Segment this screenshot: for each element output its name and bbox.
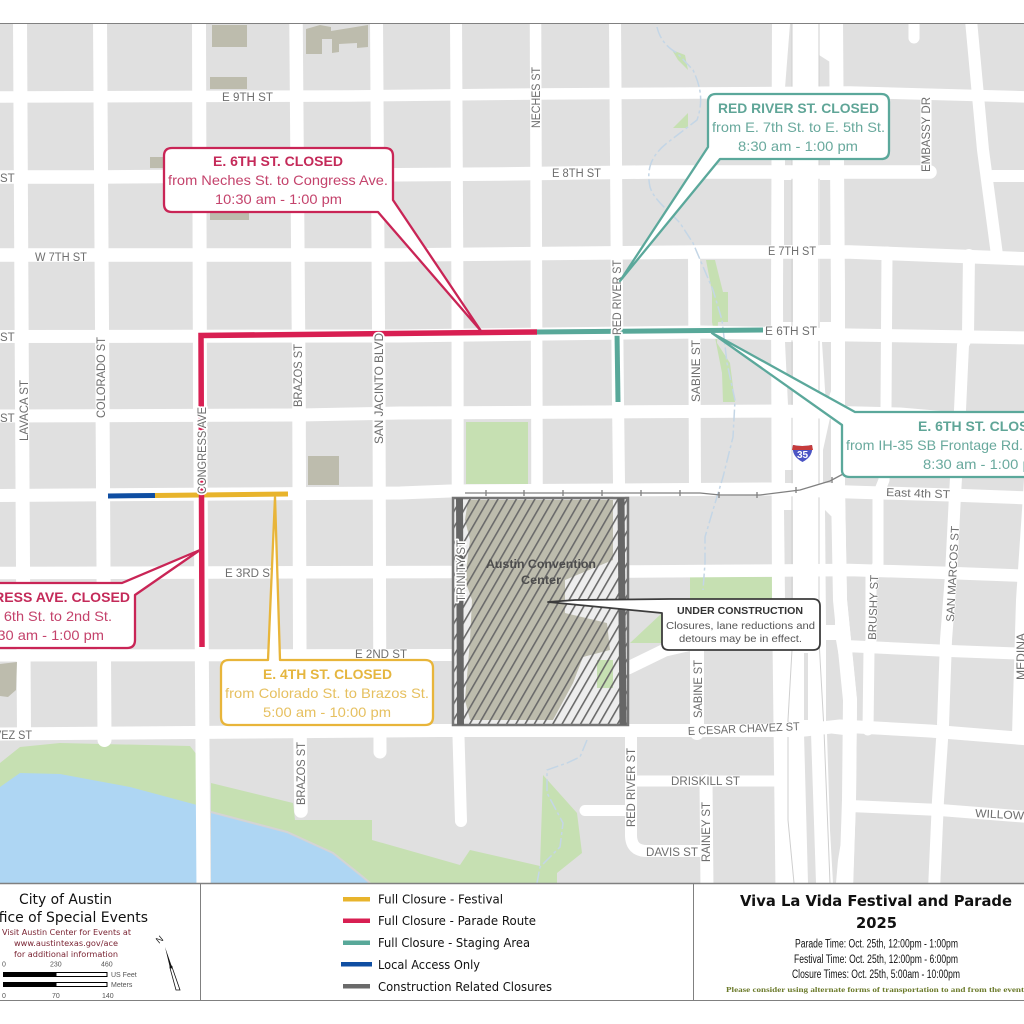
street labels: BRUSHY ST (867, 575, 881, 640)
I-35 shield icon (792, 445, 813, 462)
buildings (0, 25, 368, 697)
street labels: BRAZOS ST (296, 742, 308, 805)
label: Austin Convention Center: Center (521, 575, 562, 587)
parks (466, 50, 772, 643)
icon: north arrow (154, 934, 180, 990)
heading: office name (0, 892, 148, 926)
callout: E. 6th St. closed, Neches to Congress: 10:30 am - 1:00 pm (215, 191, 342, 207)
lake and shoreline (0, 743, 582, 883)
scale bars: 230 (50, 962, 62, 968)
scale bars: 70 (52, 993, 60, 1000)
callout: E. 6th St. closed, Neches to Congress (164, 148, 481, 331)
callout: Congress Ave. closed (0, 550, 200, 648)
event times: Closure Times: Oct. 25th, 5:00am - 10:00pm (792, 969, 960, 981)
street labels: E 8TH ST (552, 168, 601, 180)
street labels: ST (0, 173, 15, 185)
callout: E. 4th St. closed (221, 497, 433, 725)
street labels: SAN MARCOS ST (945, 526, 962, 622)
callout: under construction: Closures, lane reductions and (666, 620, 815, 632)
creek (537, 27, 735, 883)
callout: under construction: UNDER CONSTRUCTION (677, 605, 803, 617)
street labels: NECHES ST (531, 67, 543, 128)
street labels: ST (0, 413, 15, 425)
callout: E. 6th St. closed, IH-35 frontage: from IH-35 SB Frontage Rd. (846, 437, 1023, 453)
scale bars (2, 962, 137, 1000)
scale bars: 0 (2, 962, 6, 968)
callout: E. 4th St. closed: 5:00 am - 10:00 pm (263, 704, 391, 720)
scale bars: US Feet (111, 972, 137, 979)
callout: under construction (548, 599, 820, 650)
callout: Red River St. closed: from E. 7th St. to E. 5th St. (712, 119, 885, 135)
title (740, 892, 1012, 932)
railway (465, 473, 845, 498)
street labels: SABINE ST (691, 340, 703, 402)
panel: event title and times (726, 892, 1024, 994)
closure: festival and local access on E 4th St (108, 494, 288, 496)
panel: legend (341, 892, 552, 994)
callout: E. 6th St. closed, Neches to Congress: from Neches St. to Congress Ave. (168, 172, 388, 188)
legend: full closure festival: Full Closure - Festival (378, 892, 503, 906)
street labels: E 7TH ST (768, 246, 816, 258)
street labels: RED RIVER ST (612, 260, 624, 335)
label: Austin Convention Center: Austin Convention (486, 559, 596, 571)
event times: Parade Time: Oct. 25th, 12:00pm - 1:00pm (795, 938, 958, 950)
callout: E. 4th St. closed: from Colorado St. to Brazos St. (225, 685, 429, 701)
closure: parade route (201, 332, 537, 647)
heading: office name: City of Austin (19, 892, 112, 908)
scale bars: 460 (101, 962, 113, 968)
label: Austin Convention Center (486, 559, 596, 584)
street labels: EMBASSY DR (921, 97, 933, 172)
callout: E. 4th St. closed: E. 4TH ST. CLOSED (263, 666, 392, 682)
street labels (0, 67, 1024, 862)
street labels: E 2ND ST (355, 649, 407, 661)
convention center building (465, 500, 613, 720)
street labels: E 3RD ST (225, 568, 277, 580)
I-35 corridor (783, 24, 843, 883)
text: visit link: Visit Austin Center for Events at (2, 928, 131, 937)
scale bars: Meters (111, 982, 133, 989)
street labels: SAN JACINTO BLVD (374, 333, 386, 444)
callout: E. 6th St. closed, Neches to Congress: E. 6TH ST. CLOSED (213, 153, 343, 169)
panel: city of austin credits (0, 892, 180, 1000)
legend: full closure parade route: Full Closure - Parade Route (378, 914, 536, 928)
closure: staging area (537, 330, 763, 402)
callout: E. 6th St. closed, IH-35 frontage (712, 333, 1024, 477)
scale bars: 0 (2, 993, 6, 1000)
text: visit link: for additional information (14, 950, 118, 959)
legend: full closure staging area: Full Closure - Staging Area (378, 936, 530, 950)
text: visit link: www.austintexas.gov/ace (14, 939, 118, 948)
street labels: East 4th ST (886, 487, 950, 501)
text: visit link (2, 928, 131, 959)
street labels: W 7TH ST (35, 252, 87, 264)
title: Viva La Vida Festival and Parade (740, 892, 1012, 910)
construction closure lines (460, 498, 461, 725)
street labels: DRISKILL ST (671, 776, 740, 788)
event times: Festival Time: Oct. 25th, 12:00pm - 6:00pm (794, 954, 958, 966)
street labels: E 6TH ST (765, 326, 817, 338)
callout: under construction: detours may be in effect. (679, 633, 802, 645)
legend: local access only: Local Access Only (378, 958, 480, 972)
callout: Red River St. closed: 8:30 am - 1:00 pm (738, 138, 858, 154)
legend: construction related closures: Construction Related Closures (378, 980, 552, 994)
street labels: BRAZOS ST (293, 344, 305, 407)
I-35 shield icon: 35 (797, 450, 808, 461)
street labels: COLORADO ST (96, 337, 108, 418)
icon: north arrow: N (154, 934, 165, 946)
street labels: RED RIVER ST (626, 748, 638, 827)
title: 2025 (856, 914, 897, 932)
scale bars: 140 (102, 993, 114, 1000)
construction zone (453, 498, 628, 725)
callout: Red River St. closed (620, 94, 889, 281)
street labels: CONGRESS AVE (197, 407, 209, 494)
street labels: SABINE ST (693, 660, 705, 718)
callout: Red River St. closed: RED RIVER ST. CLOSED (718, 100, 879, 116)
street labels: RAINEY ST (701, 802, 713, 862)
note: alternate transportation: Please consider using alternate forms of transportation to and from the event (726, 985, 1024, 994)
street labels: WILLOW (975, 808, 1024, 823)
street labels: TRINITY ST (456, 540, 468, 602)
event times (792, 938, 960, 981)
street labels: DAVIS ST (646, 847, 698, 859)
street labels: E 9TH ST (222, 92, 273, 104)
street labels: ST (0, 332, 15, 344)
street labels: E CESAR CHAVEZ ST (688, 721, 800, 738)
street labels: LAVACA ST (19, 380, 31, 441)
